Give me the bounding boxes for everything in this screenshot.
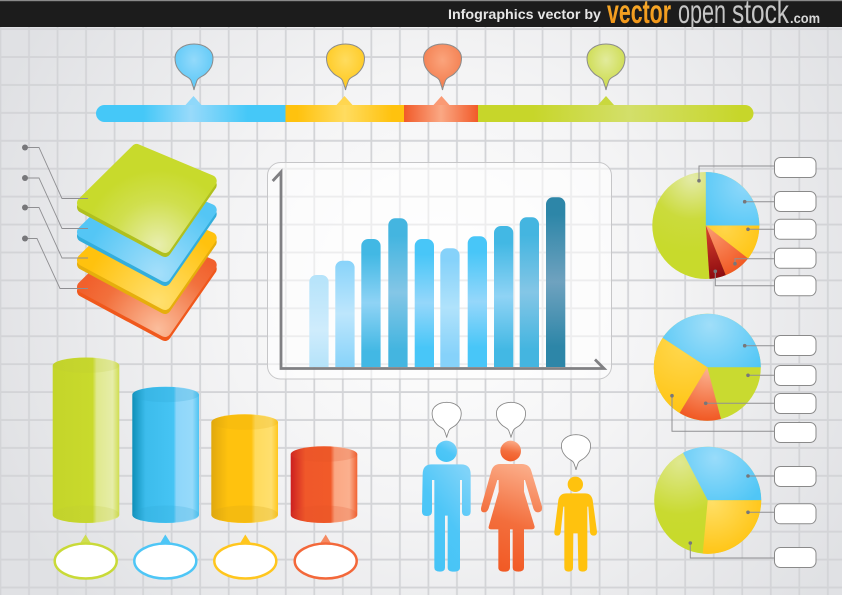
pie 1 slices (652, 172, 759, 279)
pin: yellow (326, 44, 364, 90)
cylinder chart (53, 358, 357, 523)
pin: green (587, 44, 625, 90)
timeline tick markers (186, 96, 614, 105)
pie chart 3 (654, 447, 816, 568)
figure: woman (481, 441, 542, 572)
pin: orange (424, 44, 462, 90)
header credit text (448, 0, 820, 30)
layer leader lines and dots (22, 144, 88, 288)
callout: blue (134, 534, 196, 578)
pie 3 slices (654, 447, 761, 554)
callout: green (55, 534, 117, 578)
layer: green (83, 150, 211, 251)
layer: blue (83, 179, 211, 280)
bar chart panel (268, 162, 612, 379)
pie chart 2 (654, 314, 816, 442)
timeline bar: yellow segment (286, 105, 404, 122)
cylinder: blue (132, 387, 199, 523)
cylinder: green (53, 358, 119, 523)
callout: orange (295, 534, 357, 578)
figure: man (422, 441, 471, 572)
pie 2 label boxes (774, 336, 816, 442)
pie chart 1 (652, 158, 816, 296)
cylinder: yellow (211, 414, 278, 523)
timeline bar: green segment (478, 105, 754, 122)
header bar (0, 0, 842, 30)
pie 1 leader lines (697, 166, 774, 286)
timeline bar: blue segment (96, 105, 286, 122)
header credit text: .com (790, 10, 820, 26)
oval callouts (55, 534, 357, 578)
people figures (422, 402, 597, 572)
pie 2 slices (654, 314, 761, 421)
speech bubble: child (561, 435, 591, 470)
figure: child (554, 477, 597, 572)
cylinder: orange (291, 446, 357, 523)
pie 3 label boxes (774, 466, 816, 568)
bars (309, 197, 565, 367)
pie 1 label boxes (774, 158, 816, 296)
layer: yellow (83, 207, 211, 308)
timeline bar: orange segment (404, 105, 478, 122)
stacked layers diagram (22, 144, 211, 335)
chart axes with arrow ticks (273, 172, 604, 368)
layer: orange (83, 234, 211, 335)
callout: yellow (214, 534, 276, 578)
timeline (96, 44, 754, 122)
pie 3 leader lines (688, 474, 774, 558)
speech bubble: man (432, 402, 461, 438)
speech bubble: woman (496, 402, 526, 438)
pie 2 leader lines (670, 344, 774, 431)
header credit text: Infographics vector by (448, 6, 601, 22)
pin: blue (175, 44, 213, 90)
